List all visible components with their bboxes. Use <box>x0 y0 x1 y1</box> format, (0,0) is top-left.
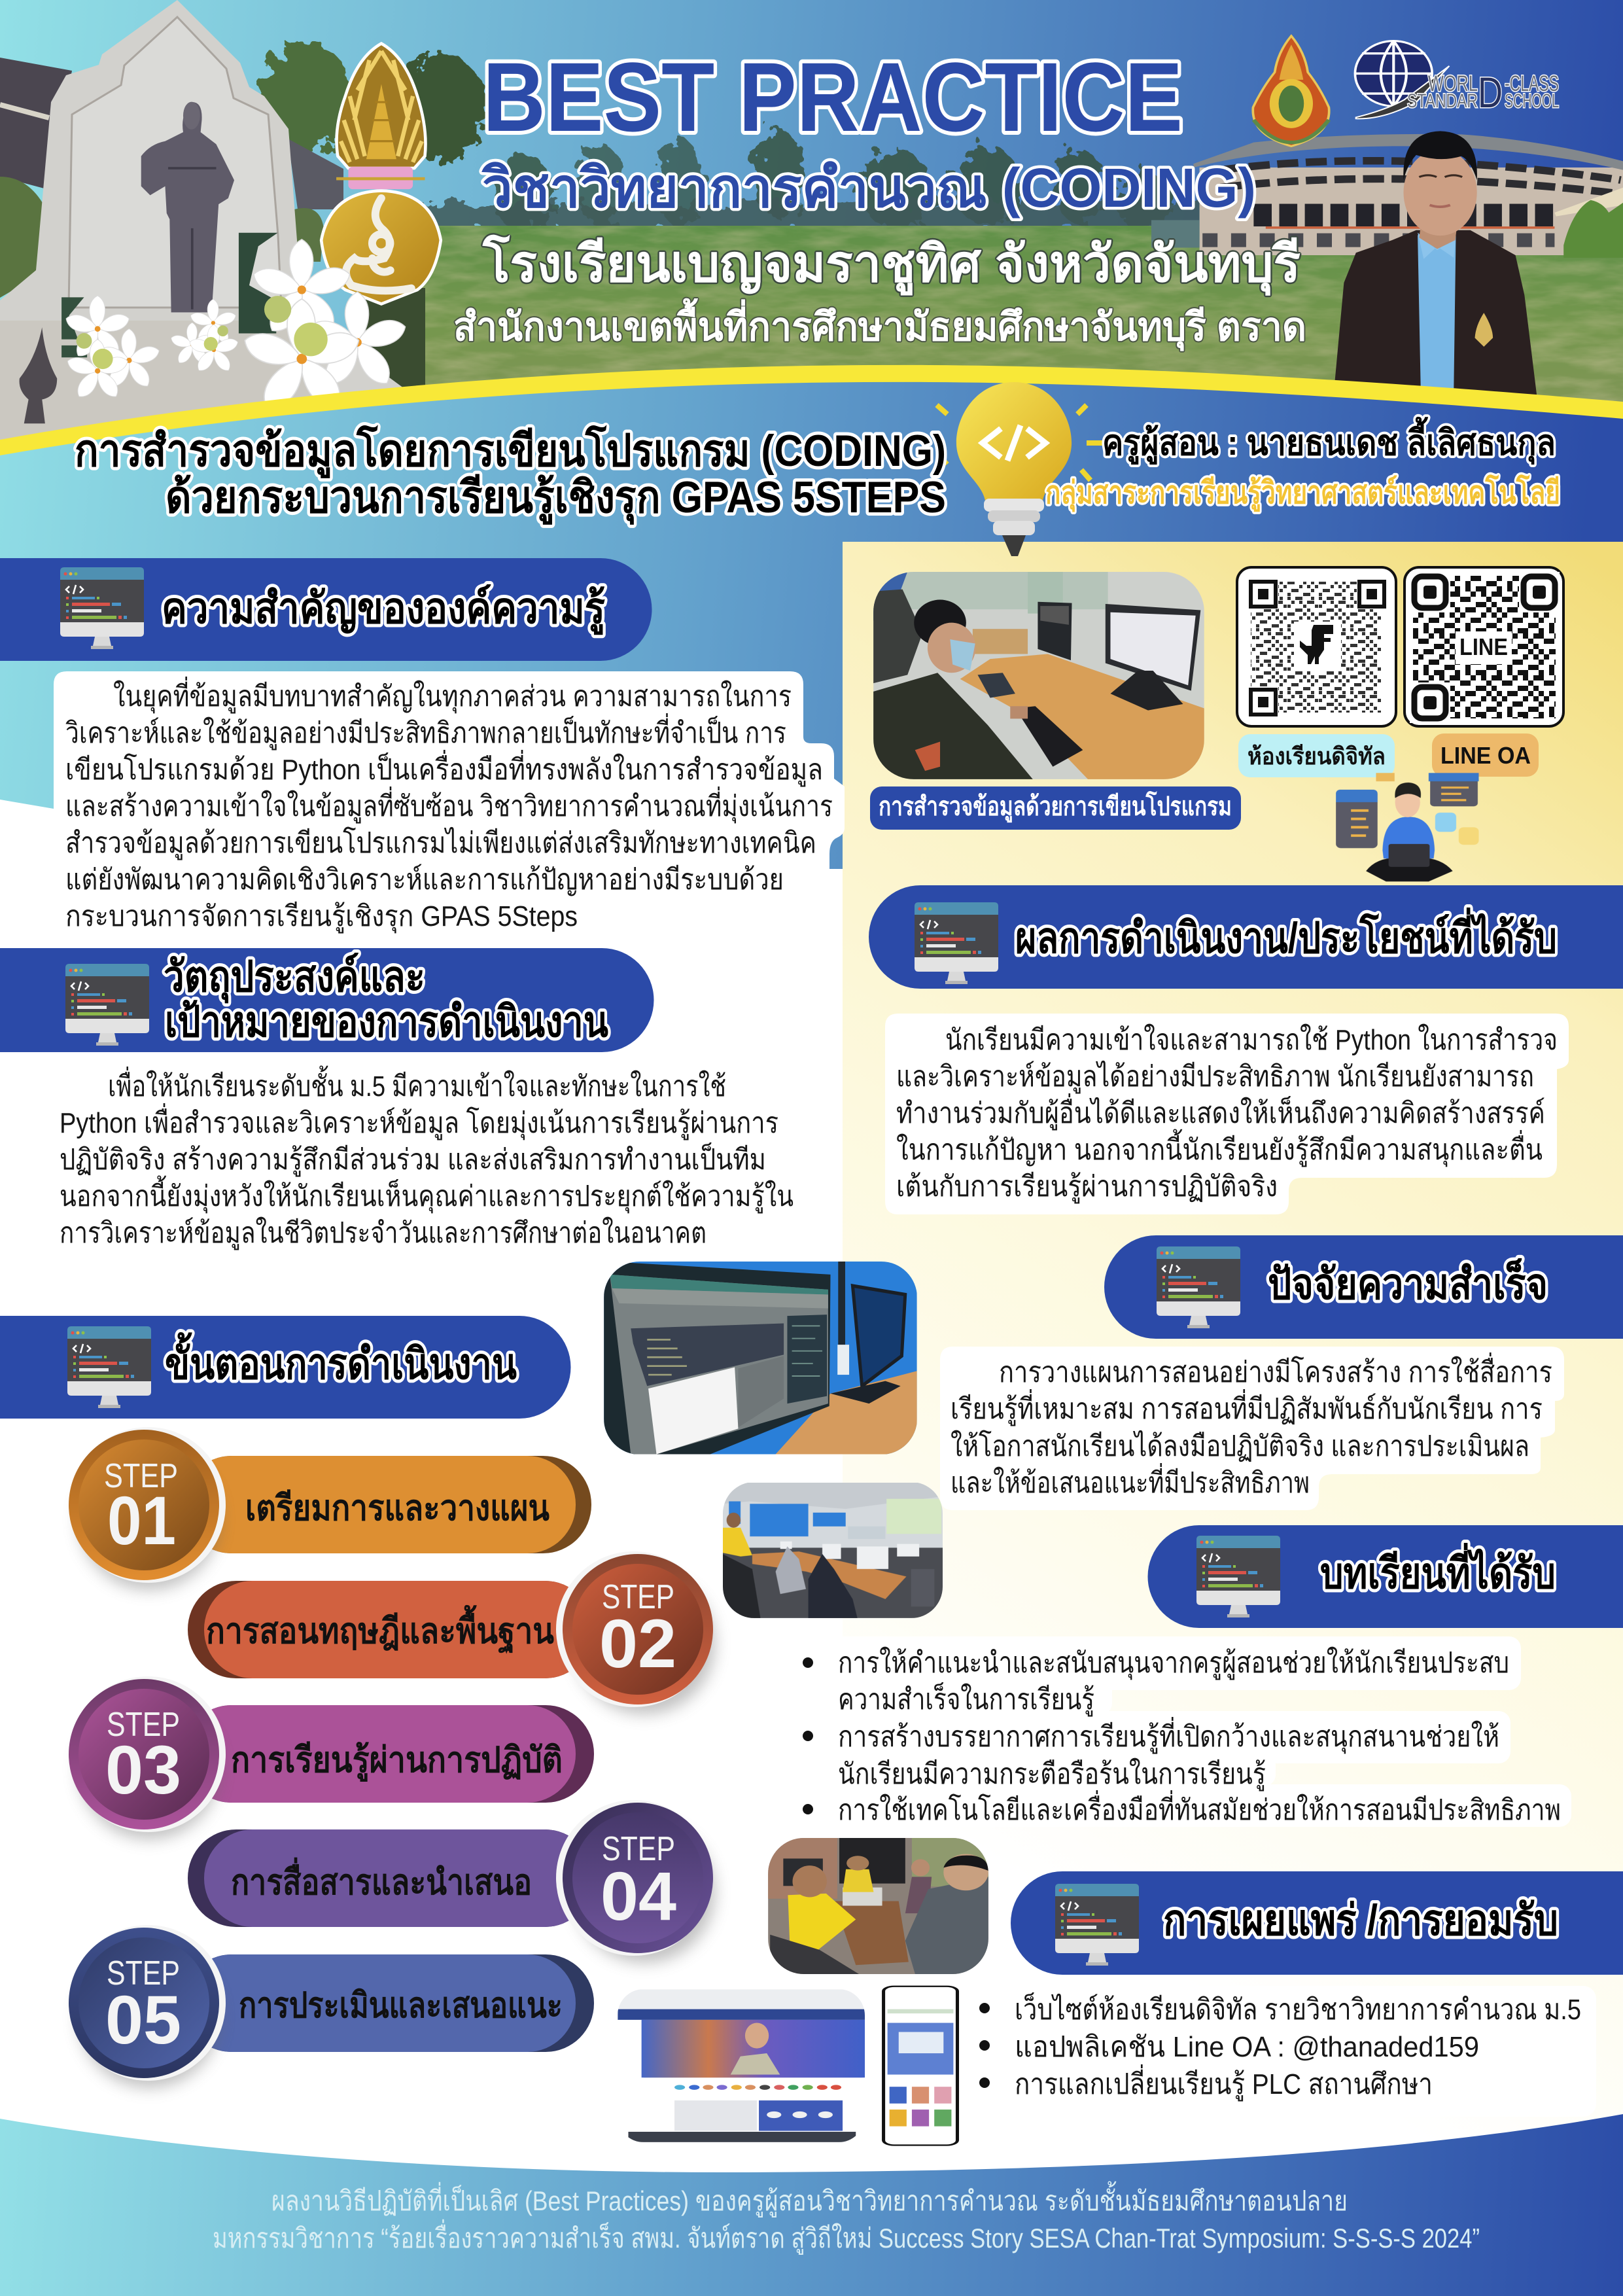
caption pill <box>870 786 1241 830</box>
step 1: 01 <box>107 1483 176 1559</box>
education office: สำนักงานเขตพื้นที่การศึกษามัธยมศึกษาจันทบุรี ตราด <box>453 298 1306 351</box>
lower header blue band <box>0 380 1623 654</box>
screenshot: line oa phone <box>884 1987 957 2145</box>
photo: computer classroom <box>722 1483 943 1618</box>
heading text: ความสำคัญขององค์ความรู้ <box>162 584 605 635</box>
illustration: programmer with laptop <box>1336 773 1478 881</box>
heading text <box>164 952 608 1046</box>
panel: dissemination heading <box>1011 1871 1623 1975</box>
world class logo: WORL <box>1428 71 1478 96</box>
heading text: การเผยแพร่ /การยอมรับ <box>1163 1896 1558 1944</box>
panel: importance text: แต่ยังพัฒนาความคิดเชิงวิเคราะห์และการแก้ปัญหาอย่างมีระบบด้วย <box>65 864 784 896</box>
panel: lessons learned list: การให้คำแนะนำและสนับสนุนจากครูผู้สอนช่วยให้นักเรียนประสบ <box>838 1646 1509 1680</box>
heading text: ปัจจัยความสำเร็จ <box>1268 1258 1548 1308</box>
world class logo <box>1355 41 1559 118</box>
screenshot: digital classroom website <box>618 1989 865 2142</box>
panel: importance text <box>0 671 845 949</box>
panel: lessons learned list: การสร้างบรรยากาศการเรียนรู้ที่เปิดกว้างและสนุกสนานช่วยให้ <box>838 1716 1499 1754</box>
step 1: STEP <box>104 1457 178 1495</box>
text block: objectives: การวิเคราะห์ข้อมูลในชีวิตประจำวันและการศึกษาต่อในอนาคต <box>60 1216 707 1250</box>
step 3: 03 <box>105 1732 181 1809</box>
step 3: STEP <box>107 1706 180 1744</box>
panel: importance heading <box>0 558 652 661</box>
rama crest logo <box>1253 36 1329 146</box>
step 2: 02 <box>599 1606 676 1682</box>
panel: results text <box>885 1014 1569 1214</box>
icon: computer code <box>67 1326 151 1408</box>
panel: lessons learned list: นักเรียนมีความกระตือรือร้นในการเรียนรู้ <box>838 1757 1266 1792</box>
step 1: เตรียมการและวางแผน <box>245 1489 550 1528</box>
world class logo: STANDAR <box>1407 90 1478 112</box>
panel: objectives heading <box>0 948 654 1052</box>
panel: success factors text: ให้โอกาสนักเรียนได้ลงมือปฏิบัติจริง และการประเมินผล <box>951 1430 1529 1462</box>
qr code: line oa <box>1405 567 1563 726</box>
panel: results heading <box>869 885 1623 989</box>
heading text: เป้าหมายของการดำเนินงาน <box>165 997 608 1046</box>
step 3: การเรียนรู้ผ่านการปฏิบัติ <box>231 1740 563 1782</box>
qr code: digital classroom <box>1237 567 1396 726</box>
world class logo: D <box>1478 68 1503 116</box>
text block: objectives: เพื่อให้นักเรียนระดับชั้น ม.5 มีความเข้าใจและทักษะในการใช้ <box>108 1065 726 1103</box>
text block: objectives: Python เพื่อสำรวจและวิเคราะห์ข้อมูล โดยมุ่งเน้นการเรียนรู้ผ่านการ <box>60 1103 778 1140</box>
step 4: การสื่อสารและนำเสนอ <box>231 1857 532 1902</box>
panel: results text: ในการแก้ปัญหา นอกจากนี้นักเรียนยังรู้สึกมีความสนุกและตื่น <box>896 1129 1543 1167</box>
panel: procedure heading <box>0 1316 570 1419</box>
text block: objectives: นอกจากนี้ยังมุ่งหวังให้นักเรียนเห็นคุณค่าและการประยุกต์ใช้ความรู้ใน <box>60 1175 794 1214</box>
world class logo: SCHOOL <box>1505 90 1559 112</box>
text block: objectives <box>60 1065 794 1250</box>
step 5 <box>69 1925 594 2088</box>
qr code: line oa: LINE <box>1459 633 1508 660</box>
heading text: บทเรียนที่ได้รับ <box>1320 1542 1556 1597</box>
step 4 <box>188 1800 715 1963</box>
label: line oa: LINE OA <box>1440 742 1531 769</box>
panel: results text: เต้นกับการเรียนรู้ผ่านการปฏิบัติจริง <box>896 1171 1278 1204</box>
icon: computer code <box>915 902 998 984</box>
step 4: 04 <box>601 1858 676 1935</box>
step 5: STEP <box>107 1954 180 1992</box>
school name: โรงเรียนเบญจมราชูทิศ จังหวัดจันทบุรี <box>482 234 1300 296</box>
panel: importance text: เขียนโปรแกรมด้วย Python เป็นเครื่องมือที่ทรงพลังในการสำรวจข้อมูล <box>65 749 823 787</box>
icon: computer code <box>60 567 144 649</box>
icon: computer code <box>1157 1246 1240 1328</box>
world class logo: -CLASS <box>1505 71 1559 96</box>
top gradient background <box>0 0 1623 870</box>
project title: ด้วยกระบวนการเรียนรู้เชิงรุก GPAS 5STEPS <box>166 472 946 525</box>
project title <box>75 425 946 525</box>
photo: computer screen with colab <box>604 1262 917 1454</box>
yellow swoosh <box>0 365 1623 455</box>
heading text: วัตถุประสงค์และ <box>164 952 425 1004</box>
panel: success factors text: การวางแผนการสอนอย่างมีโครงสร้าง การใช้สื่อการ <box>999 1352 1552 1388</box>
step 4: STEP <box>602 1830 675 1868</box>
panel: importance text: สำรวจข้อมูลด้วยการเขียนโปรแกรมไม่เพียงแต่ส่งเสริมทักษะทางเทคนิค <box>65 826 816 860</box>
teacher name: ครูผู้สอน : นายธนเดช ลี้เลิศธนกุล <box>1102 417 1556 465</box>
heading text: ขั้นตอนการดำเนินงาน <box>165 1332 517 1388</box>
step 3 <box>69 1676 594 1839</box>
statue <box>141 102 234 312</box>
school building <box>1151 134 1623 258</box>
grass field <box>399 226 1623 435</box>
panel: dissemination list: แอปพลิเคชัน Line OA : @thanaded159 <box>1015 2031 1479 2063</box>
icon: computer code <box>65 964 149 1046</box>
panel: lessons learned list: ความสำเร็จในการเรียนรู้ <box>838 1682 1094 1717</box>
label: line oa <box>1432 733 1539 777</box>
panel: lessons learned heading <box>1147 1525 1623 1628</box>
subject title: วิชาวิทยาการคำนวณ (CODING) <box>481 157 1256 219</box>
panel: importance text: กระบวนการจัดการเรียนรู้เชิงรุก GPAS 5Steps <box>65 900 578 934</box>
main title: BEST PRACTICE <box>483 42 1183 152</box>
panel: success factors text: และให้ข้อเสนอแนะที่มีประสิทธิภาพ <box>951 1462 1310 1499</box>
white flowers <box>61 233 409 416</box>
project title: การสำรวจข้อมูลโดยการเขียนโปรแกรม (CODING) <box>75 425 946 479</box>
icon: computer code <box>1196 1536 1280 1617</box>
vase ornament <box>20 327 57 423</box>
text block: objectives: ปฏิบัติจริง สร้างความรู้สึกมีส่วนร่วม และส่งเสริมการทำงานเป็นทีม <box>60 1142 766 1177</box>
caption pill: การสำรวจข้อมูลด้วยการเขียนโปรแกรม <box>879 791 1232 822</box>
footer band <box>0 2114 1623 2296</box>
panel: right yellow background <box>843 542 1623 2184</box>
step 2: การสอนทฤษฎีและพื้นฐาน <box>206 1605 554 1654</box>
photo: teachers meeting <box>768 1838 988 1974</box>
teacher portrait <box>1335 131 1537 398</box>
label: digital classroom <box>1238 734 1395 777</box>
icon: computer code <box>1055 1884 1139 1966</box>
panel: dissemination list: การแลกเปลี่ยนเรียนรู้ PLC สถานศึกษา <box>1015 2064 1433 2102</box>
panel: success factors text <box>940 1347 1564 1510</box>
icon: light bulb with code symbol <box>937 382 1117 556</box>
header photo: school grounds <box>0 0 1623 458</box>
gold school emblem <box>321 44 441 304</box>
step 5: การประเมินและเสนอแนะ <box>239 1986 563 2025</box>
trees <box>259 43 1223 233</box>
step 2 <box>188 1551 715 1714</box>
bush behind emblem <box>358 288 425 393</box>
panel: success factors heading <box>1104 1235 1623 1339</box>
panel: lessons learned list <box>785 1636 1571 1827</box>
panel: importance text: วิเคราะห์และใช้ข้อมูลอย่างมีประสิทธิภาพกลายเป็นทักษะที่จำเป็น การ <box>65 713 786 751</box>
step 5: 05 <box>105 1982 181 2058</box>
photo: student at computer <box>873 572 1204 779</box>
panel: success factors text: เรียนรู้ที่เหมาะสม การสอนที่มีปฏิสัมพันธ์กับนักเรียน การ <box>951 1388 1543 1426</box>
panel: importance text: และสร้างความเข้าใจในข้อมูลที่ซับซ้อน วิชาวิทยาการคำนวณที่มุ่งเน้นการ <box>65 786 833 824</box>
panel: importance text: ในยุคที่ข้อมูลมีบทบาทสำคัญในทุกภาคส่วน ความสามารถในการ <box>113 676 792 714</box>
step 2: STEP <box>602 1578 674 1616</box>
footer text: ผลงานวิธีปฏิบัติที่เป็นเลิศ (Best Practices) ของครูผู้สอนวิชาวิทยาการคำนวณ ระดับชั้นมัธยมศึกษาตอนปลาย <box>271 2181 1348 2217</box>
step 1 <box>69 1427 591 1590</box>
monument wall left <box>0 0 419 458</box>
panel: dissemination list <box>968 1986 1596 2117</box>
label: digital classroom: ห้องเรียนดิจิทัล <box>1248 743 1386 769</box>
